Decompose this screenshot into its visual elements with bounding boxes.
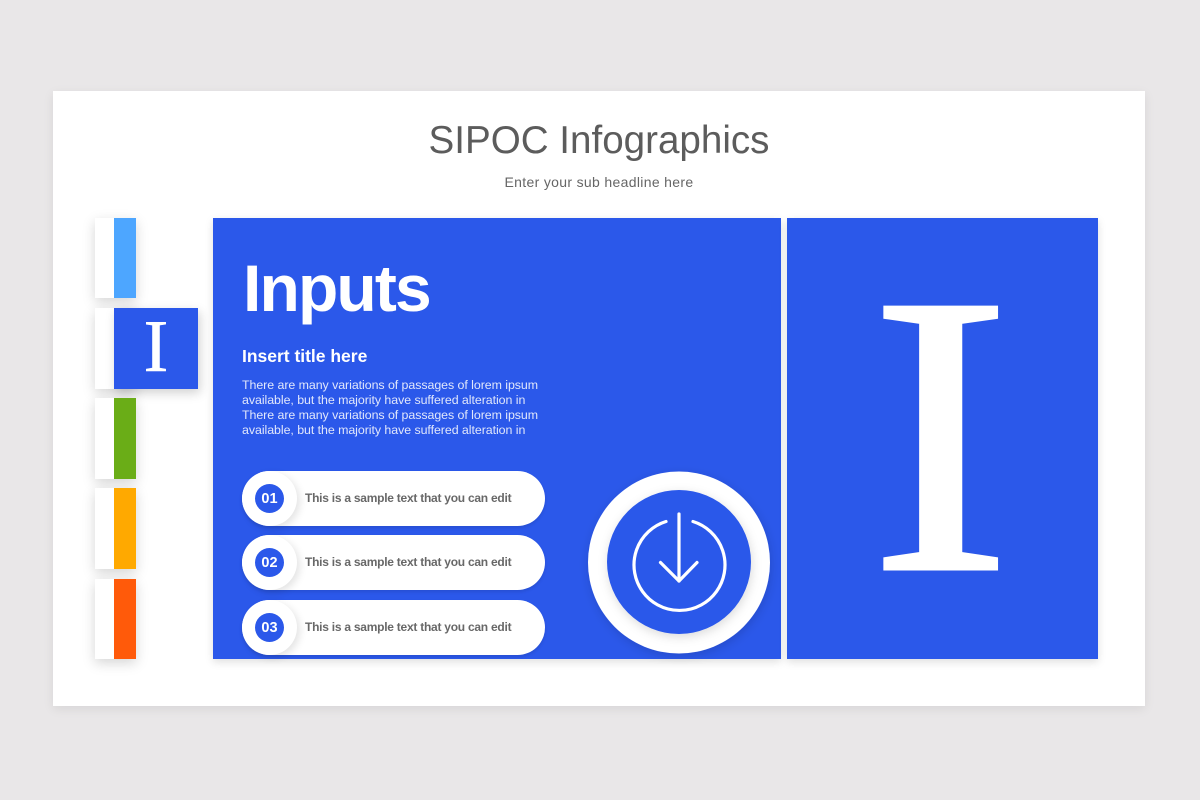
tab: O amber — [95, 488, 136, 569]
heading: Inputs: Inputs — [243, 251, 430, 325]
list item 02 — [242, 535, 545, 590]
body text: There are many variations of passages of lorem ipsum — [242, 378, 538, 392]
tab: S light blue — [95, 218, 136, 298]
list item 03: 03 — [261, 620, 278, 636]
list item 01: 01 — [261, 491, 278, 507]
title: SIPOC Infographics — [429, 119, 769, 162]
tab: C orange — [95, 579, 136, 659]
tab: I blue panel with letter: I — [144, 306, 168, 388]
subtitle: Enter your sub headline here — [504, 174, 694, 190]
list item 01 — [242, 471, 545, 526]
tab: P green — [95, 398, 136, 479]
right blue panel — [787, 218, 1098, 659]
body text — [242, 378, 538, 437]
body text: available, but the majority have suffered alteration in — [242, 393, 525, 407]
tab: I blue panel with letter — [114, 308, 198, 389]
list item 02: This is a sample text that you can edit — [305, 555, 511, 569]
list item 03 — [242, 600, 545, 655]
list item 03: This is a sample text that you can edit — [305, 620, 511, 634]
main blue panel — [213, 218, 781, 659]
list item 02: 02 — [261, 555, 278, 571]
subheading: Insert title here — [242, 346, 367, 366]
list item 01: This is a sample text that you can edit — [305, 491, 511, 505]
download icon badge — [586, 472, 774, 660]
tab: I active — [95, 308, 136, 389]
large letter I: I — [870, 212, 1011, 656]
body text: There are many variations of passages of lorem ipsum — [242, 408, 538, 422]
body text: available, but the majority have suffered alteration in — [242, 423, 525, 437]
slide card — [53, 91, 1145, 706]
